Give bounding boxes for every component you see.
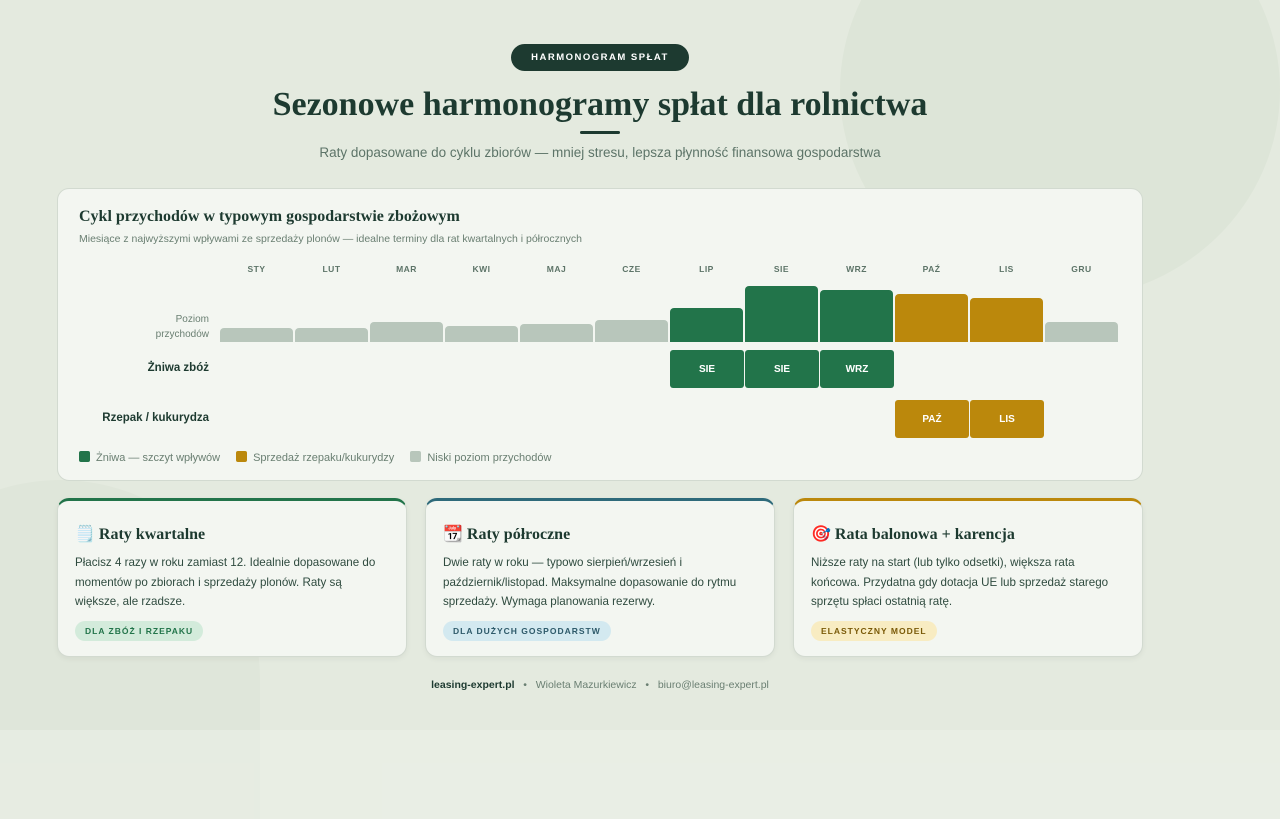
badge (511, 44, 689, 71)
panel: chart (57, 188, 1143, 481)
card: balloon: Niższe raty na start (lub tylko odsetki), większa rata końcowa. Przydatna gdy dotacja UE lub sprzedaż starego sprzętu spłaci ostatnią ratę. (811, 556, 1108, 608)
month labels: KWI (472, 264, 491, 274)
month labels (247, 264, 1092, 274)
month labels: STY (247, 264, 266, 274)
month labels: MAR (396, 264, 417, 274)
card: semi-annual: Dwie raty w roku — typowo sierpień/wrzesień i październik/listopad. Maksymalne dopasowanie do rytmu sprzedaży. Wymaga planowania rezerwy. (443, 556, 736, 608)
panel: chart: Miesiące z najwyższymi wpływami ze sprzedaży plonów — idealne terminy dla rat kwartalnych i półrocznych (79, 233, 582, 245)
card: balloon: ELASTYCZNY MODEL (821, 626, 927, 636)
row label: revenue: Poziom (176, 314, 209, 325)
card: semi-annual: 📆 Raty półroczne (443, 526, 570, 543)
subtitle: Raty dopasowane do cyklu zbiorów — mniej stresu, lepsza płynność finansowa gospodarstwa (319, 145, 881, 160)
month labels: SIE (774, 264, 789, 274)
card: quarterly: Płacisz 4 razy w roku zamiast 12. Idealnie dopasowane do momentów po zbiorach i sprzedaży plonów. Raty są większe, ale rzadsze. (75, 556, 375, 608)
row: harvest (148, 350, 894, 388)
legend: Niski poziom przychodów (427, 452, 551, 464)
month labels: LIP (699, 264, 714, 274)
row: rapeseed: LIS (999, 414, 1015, 424)
chart title: Cykl przychodów w typowym gospodarstwie zbożowym (79, 208, 460, 225)
card: balloon (793, 498, 1143, 657)
legend: Sprzedaż rzepaku/kukurydzy (253, 452, 394, 464)
card: semi-annual: DLA DUŻYCH GOSPODARSTW (453, 626, 601, 636)
row: rapeseed (102, 400, 1044, 438)
month labels: LUT (322, 264, 341, 274)
legend: Żniwa — szczyt wpływów (96, 452, 220, 464)
row label: revenue: przychodów (156, 329, 209, 340)
row: rapeseed: Rzepak / kukurydza (102, 412, 209, 424)
month labels: WRZ (846, 264, 867, 274)
card: balloon: 🎯 Rata balonowa + karencja (811, 526, 1015, 543)
footer: leasing-expert.pl • Wioleta Mazurkiewicz • biuro@leasing-expert.pl (431, 679, 769, 691)
title: Sezonowe harmonogramy spłat dla rolnictwa (273, 86, 927, 123)
month labels: LIS (999, 264, 1014, 274)
month labels: MAJ (547, 264, 566, 274)
month labels: CZE (622, 264, 641, 274)
month labels: PAŹ (923, 264, 940, 274)
legend (79, 451, 552, 464)
card: semi-annual (425, 498, 775, 657)
row: harvest: SIE (774, 364, 790, 374)
card: quarterly: DLA ZBÓŻ I RZEPAKU (85, 626, 193, 636)
month labels: GRU (1071, 264, 1092, 274)
row: harvest: Żniwa zbóż (148, 362, 209, 374)
card: quarterly (57, 498, 407, 657)
bar chart (220, 286, 1118, 342)
row label: revenue (156, 314, 209, 340)
row: harvest: SIE (699, 364, 715, 374)
row: harvest: WRZ (846, 364, 868, 374)
row: rapeseed: PAŹ (922, 414, 942, 424)
card: quarterly: 🗒️ Raty kwartalne (75, 526, 205, 543)
badge: HARMONOGRAM SPŁAT (531, 52, 669, 63)
